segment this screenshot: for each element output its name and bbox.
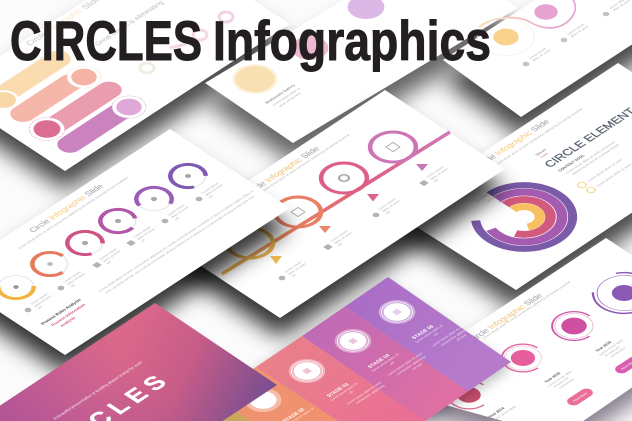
caption 5: elit — [173, 216, 180, 221]
cover subtitle: A beautiful presentation & leading planet trump for ever — [52, 360, 144, 421]
ring: pink — [52, 222, 118, 264]
text block: process rules: Process Information — [50, 302, 87, 327]
pill: salmon — [5, 70, 89, 126]
circle: pink — [493, 338, 553, 378]
caption: pink step: dolor sit amet — [381, 199, 401, 213]
button: rose — [564, 387, 596, 407]
icon: mauve circle — [105, 91, 153, 123]
text block: multimedia gallery: Multimedia Gallery — [264, 83, 297, 105]
panel: circle element slide — [393, 63, 632, 309]
subheading line: Lorem ipsum dolor sit amet consectetur adipiscing elit sed do eiusmod tempor incididunt — [17, 176, 130, 250]
text block: year 2015 — [542, 366, 581, 392]
caption 5: dolor sit amet — [170, 205, 190, 219]
chart labels: Text label — [485, 193, 501, 203]
caption: yellow step: elit — [290, 273, 297, 278]
caption 6 — [192, 181, 228, 204]
arrow: yellow triangle — [270, 256, 282, 264]
arrow: mauve triangle — [416, 164, 428, 171]
icon: purple circle — [340, 0, 392, 24]
text: stage 06: Lorem ipsum dolor sit amet — [431, 323, 468, 347]
title: Infographics — [213, 9, 491, 72]
ring: mauve with icon — [361, 126, 425, 168]
ring: pink with icon — [312, 157, 376, 199]
caption 6: dolor sit amet — [204, 183, 224, 197]
caption: yellow step: Lorem ipsum — [528, 47, 548, 60]
caption 4: elit — [139, 238, 146, 243]
panel: stages slide — [163, 277, 511, 421]
caption 2: elit — [69, 283, 76, 288]
text block: year 2015: consectetur — [558, 377, 576, 389]
text: stage 06 — [409, 313, 476, 356]
caption: pink step: dolor sit amet — [569, 25, 590, 38]
ring: salmon — [25, 248, 75, 280]
slide heading: Circle Infographic Slide — [473, 118, 552, 170]
text: stage 03: Lorem ipsum dolor sit — [329, 382, 359, 402]
faded ring chain — [140, 12, 233, 73]
circle: purple — [564, 254, 632, 332]
ring: yellow — [0, 264, 51, 310]
timeline line — [222, 132, 450, 274]
caption: pink step — [558, 22, 590, 43]
column: stage 02 orange — [213, 367, 382, 421]
text block: pill slide intro: Great design is eliminating — [94, 0, 166, 47]
caption: mauve step: elit — [432, 178, 439, 183]
caption: yellow step: dolor sit amet — [287, 262, 307, 276]
caption: yellow step — [275, 260, 311, 283]
text block: multimedia gallery: Lorem ipsum dolor sit — [271, 87, 302, 107]
text: stage 06: elit — [433, 332, 440, 337]
title: CIRCLES — [10, 9, 202, 72]
arrow: salmon triangle — [319, 226, 331, 233]
arrow: pink triangle — [367, 194, 379, 202]
text: stage 06: consectetur adipiscing — [440, 326, 471, 347]
arc: yellow band — [502, 202, 546, 232]
column: olive — [170, 396, 339, 421]
ring: salmon with icon — [266, 191, 330, 233]
subheading line: Lorem ipsum dolor sit amet consectetur adipiscing elit sed do eiusmod — [481, 281, 572, 340]
label: stream data: Stream — [534, 148, 548, 157]
legend item 2 — [585, 162, 632, 194]
text block: multimedia gallery: amet consectetur — [277, 91, 303, 108]
icon: yellow circle — [223, 58, 287, 100]
icon: yellow circle — [0, 86, 25, 114]
text: stage 03: consectetur adipiscing — [355, 384, 386, 405]
caption 6: elit — [207, 194, 214, 199]
chart labels — [474, 187, 516, 214]
caption 1: elit — [36, 305, 43, 310]
label: stream data — [534, 148, 552, 159]
panel: year circles slide — [381, 238, 632, 421]
panel: timeline slide — [160, 90, 505, 337]
chart labels: Text — [507, 199, 516, 205]
ring: purple — [125, 180, 183, 218]
panel: cover slide — [0, 303, 277, 421]
caption 2: Lorem ipsum — [62, 270, 82, 283]
caption: salmon step: dolor sit amet — [333, 231, 353, 245]
caption 3 — [90, 247, 126, 270]
caption 4: Lorem ipsum — [132, 225, 152, 238]
pill: pink — [39, 78, 127, 136]
arc: red band — [486, 192, 562, 242]
caption: third step — [600, 0, 632, 17]
panel: pill list slide — [0, 0, 290, 190]
text block: multimedia gallery — [264, 83, 306, 110]
text: stage 06: STAGE 06 — [411, 324, 436, 341]
radial bar chart — [455, 172, 593, 262]
slide heading: Circle Infographic Slide — [27, 183, 106, 234]
icon: salmon circle — [60, 61, 108, 93]
column: stage 03 salmon — [256, 336, 425, 421]
caption: yellow step: dolor sit amet — [531, 49, 552, 62]
caption: mauve step: dolor sit amet — [429, 167, 449, 181]
caption 6: Lorem ipsum — [200, 181, 220, 194]
text block: year 2015: Year 2015 — [543, 371, 562, 384]
button: magenta — [612, 355, 632, 375]
caption: salmon step: Lorem ipsum — [329, 229, 349, 242]
text: stage 03: STAGE 03 — [326, 382, 351, 399]
icon: pink circle — [22, 113, 72, 145]
text block: process rules — [40, 297, 94, 333]
chart labels: Text — [496, 198, 505, 204]
text: stage 04: elit sed — [411, 363, 423, 371]
caption 4 — [124, 225, 160, 248]
slide heading: Circle Infographic Slide — [466, 292, 545, 344]
ring: violet — [155, 154, 221, 198]
panel: curve timeline slide — [443, 0, 632, 137]
panel: ring progress slide — [0, 129, 290, 374]
text: stage 04 — [365, 342, 432, 385]
icon: pale ring — [466, 11, 546, 63]
caption: pink step: Lorem ipsum — [377, 197, 397, 210]
caption 3: Lorem ipsum — [98, 247, 118, 260]
text block: year 2016: sit amet elit — [603, 346, 621, 357]
text block: year 2016: Year 2016 — [594, 341, 613, 353]
text block: paragraph: Lorem ipsum dolor sit amet, consectetur adipiscing elit, sed do eiusmod tempor incididunt ut labore et dolore magna aliqua ut — [97, 189, 255, 293]
subheading line: Lorem ipsum dolor sit amet consectetur adipiscing elit sed do eiusmod — [260, 134, 351, 193]
caption: mauve step — [417, 165, 453, 188]
caption 2: dolor sit amet — [66, 272, 86, 286]
text: stage 03: elit — [348, 390, 355, 395]
legend item 2: Lorem ipsum dolor sit amet — [595, 163, 632, 187]
legend item 1: Lorem ipsum dolor sit amet — [586, 158, 623, 182]
panel: gallery slide — [205, 0, 518, 163]
caption 4: dolor sit amet — [136, 227, 156, 241]
pill: mauve — [52, 100, 138, 156]
caption: pink step: elit — [384, 210, 391, 215]
slide heading: Circle Infographic Slide — [243, 145, 322, 197]
caption: salmon step: elit — [336, 242, 343, 247]
legend item 1 — [576, 157, 625, 189]
circle: stage 06 — [371, 295, 423, 329]
caption: salmon step — [321, 229, 357, 252]
text block: content — [557, 137, 621, 178]
caption 1: dolor sit amet — [33, 294, 53, 308]
text block: year 2016: Lorem ipsum dolor — [598, 338, 625, 356]
text block: process rules: Analysis — [59, 315, 77, 328]
pill: yellow — [0, 47, 76, 105]
text: stage 04: Lorem ipsum dolor sit amet — [387, 352, 424, 376]
icon: pink circle — [529, 1, 563, 23]
arc: magenta band — [470, 182, 578, 252]
text block: content: Lorem ipsum dolor sit amet consectetur — [564, 140, 617, 175]
text block: year 2015: Lorem ipsum dolor — [547, 369, 574, 387]
caption: pink step — [369, 197, 405, 220]
text block: year 2015: sit amet elit — [552, 377, 570, 388]
circle: stage 03 — [281, 354, 333, 388]
ring: yellow — [218, 222, 282, 264]
caption 1: Lorem ipsum — [29, 292, 49, 305]
text: stage 03: Lorem ipsum dolor sit amet — [346, 381, 383, 405]
text: stage 04: consectetur adipiscing — [396, 355, 427, 376]
text block: year 2016: consectetur — [609, 346, 627, 358]
text: stage 06: Lorem ipsum dolor sit — [414, 324, 444, 344]
button: rose: Read More — [572, 392, 588, 402]
caption: yellow step — [520, 46, 552, 67]
caption 1 — [21, 292, 57, 315]
text block: year 2014: Year 2014 — [487, 406, 506, 419]
caption: pink step: Lorem ipsum — [566, 23, 586, 36]
circle: magenta — [543, 306, 605, 346]
label: stream data: Data — [539, 152, 549, 159]
icon: pink circle — [284, 31, 336, 65]
caption: yellow step: Lorem ipsum — [283, 260, 303, 273]
arc: purple band — [455, 172, 593, 262]
text block: process rules: Process Rules Analysis — [40, 297, 83, 326]
text block: content: CONTENT SOUL — [557, 154, 587, 173]
text: stage 04: STAGE 04 — [367, 353, 392, 370]
caption 5 — [158, 203, 194, 226]
text block: year 2016 — [593, 335, 632, 361]
caption: mauve step: Lorem ipsum — [425, 165, 445, 178]
column: stage 06 purple — [345, 277, 511, 392]
circle: stage 02 — [237, 383, 289, 417]
chart labels: Text label — [474, 193, 490, 203]
subheading line: Lorem ipsum dolor sit amet consectetur adipiscing elit sed do eiusmod — [493, 108, 584, 167]
circle: stage 04 — [327, 324, 379, 358]
caption 5: Lorem ipsum — [166, 203, 186, 216]
title — [10, 9, 491, 72]
text: stage 06: elit sed — [455, 334, 467, 342]
caption 3: dolor sit amet — [102, 249, 122, 263]
text block: paragraph: enim ad minim veniam, quis nostrud exercitation ullamco laboris nisi ut aliquip ex ea commodo consequat duis aute irure — [104, 195, 256, 294]
circle: red — [439, 375, 499, 415]
text: stage 04: elit — [389, 361, 396, 366]
column: stage 04 pink — [302, 306, 468, 421]
caption 3: elit — [105, 260, 112, 265]
caption 2 — [54, 270, 90, 293]
text: stage 03 — [324, 371, 387, 411]
text: stage 04: Lorem ipsum dolor sit — [370, 353, 400, 373]
text block: content: adipiscing elit sed do eiusmod tempor — [570, 143, 621, 176]
ring: mauve — [89, 202, 147, 240]
text block: year 2014 — [486, 401, 518, 421]
icon: yellow circle — [488, 25, 524, 49]
curve line — [479, 0, 575, 28]
